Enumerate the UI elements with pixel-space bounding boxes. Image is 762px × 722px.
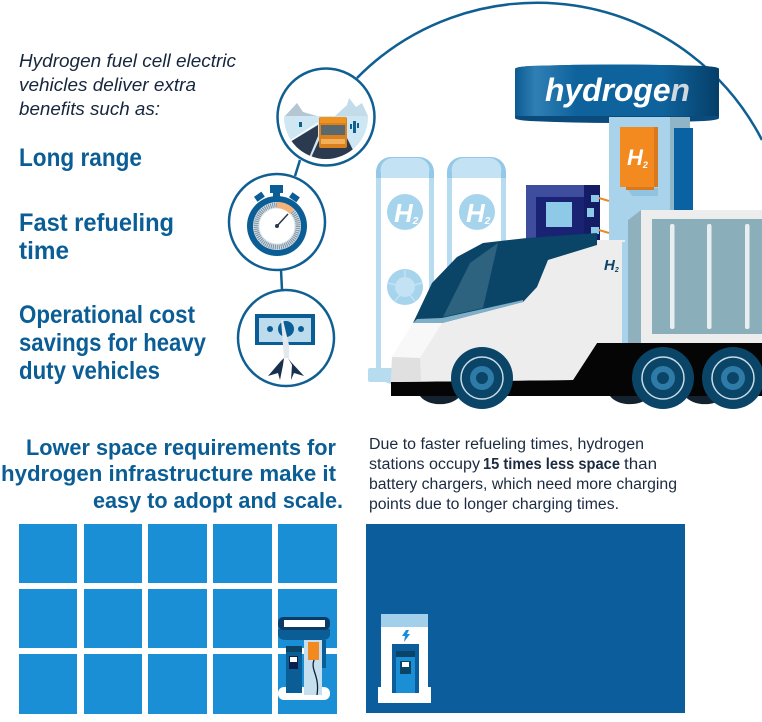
intro text: vehicles deliver extra [19, 74, 196, 95]
icon: banknote and scissors [238, 290, 334, 386]
station pillar: H [627, 145, 643, 170]
hydrogen tank right: H [466, 198, 485, 228]
heading: lower space requirements: Lower space requirements for [26, 435, 336, 460]
icon: truck on desert road [278, 68, 374, 166]
benefit: operational cost savings [19, 301, 206, 385]
hydrogen tank left: H [394, 198, 413, 228]
icon: stopwatch [229, 174, 325, 270]
paragraph: refueling space: points due to longer charging times. [369, 496, 619, 513]
connector arc [281, 3, 762, 290]
heading: lower space requirements: hydrogen infrastructure make it [1, 461, 337, 486]
station pillar: 2 [642, 160, 648, 170]
paragraph: refueling space: 15 times less space [483, 456, 620, 473]
grid of land plots: hydrogen [19, 524, 337, 714]
benefit: fast refueling time: Fast refueling [19, 209, 174, 237]
heading: lower space requirements [1, 435, 343, 513]
paragraph: refueling space: stations occupy [369, 456, 480, 473]
heading: lower space requirements: easy to adopt and scale. [93, 488, 343, 513]
benefit: fast refueling time [19, 209, 174, 265]
wheels [420, 347, 762, 409]
hydrogen tank left: 2 [412, 216, 419, 227]
paragraph: refueling space: battery chargers, which need more charging [369, 476, 677, 493]
hydrogen tank left [368, 157, 434, 382]
hydrogen sign: hydrogen [545, 72, 690, 108]
icon: small hydrogen station [278, 617, 330, 700]
paragraph: refueling space: Due to faster refueling times, hydrogen [369, 436, 644, 453]
intro text: Hydrogen fuel cell electric [19, 50, 237, 71]
cab side panel [597, 240, 628, 343]
benefit: operational cost savings: savings for heavy [19, 329, 206, 357]
dispenser unit [526, 185, 609, 241]
intro text [19, 50, 237, 119]
chassis [391, 343, 762, 396]
cab body [391, 245, 597, 382]
intro text: benefits such as: [19, 98, 160, 119]
paragraph: refueling space: than [624, 456, 657, 473]
hydrogen tank right [447, 157, 506, 382]
icon: battery charging station [378, 614, 431, 703]
station pillar [609, 117, 693, 247]
windscreen [413, 233, 597, 323]
land plot: battery chargers [366, 524, 685, 713]
cab side panel: H [604, 257, 615, 274]
benefit: operational cost savings: Operational cost [19, 301, 196, 329]
paragraph: refueling space [369, 436, 677, 513]
cab side panel: 2 [614, 267, 619, 274]
benefit: fast refueling time: time [19, 237, 69, 265]
truck [391, 210, 762, 409]
cargo container [628, 210, 762, 343]
hydrogen tank right: 2 [484, 216, 491, 227]
hydrogen sign [515, 64, 719, 123]
benefit: operational cost savings: duty vehicles [19, 357, 160, 385]
benefit: long range: Long range [19, 144, 142, 172]
